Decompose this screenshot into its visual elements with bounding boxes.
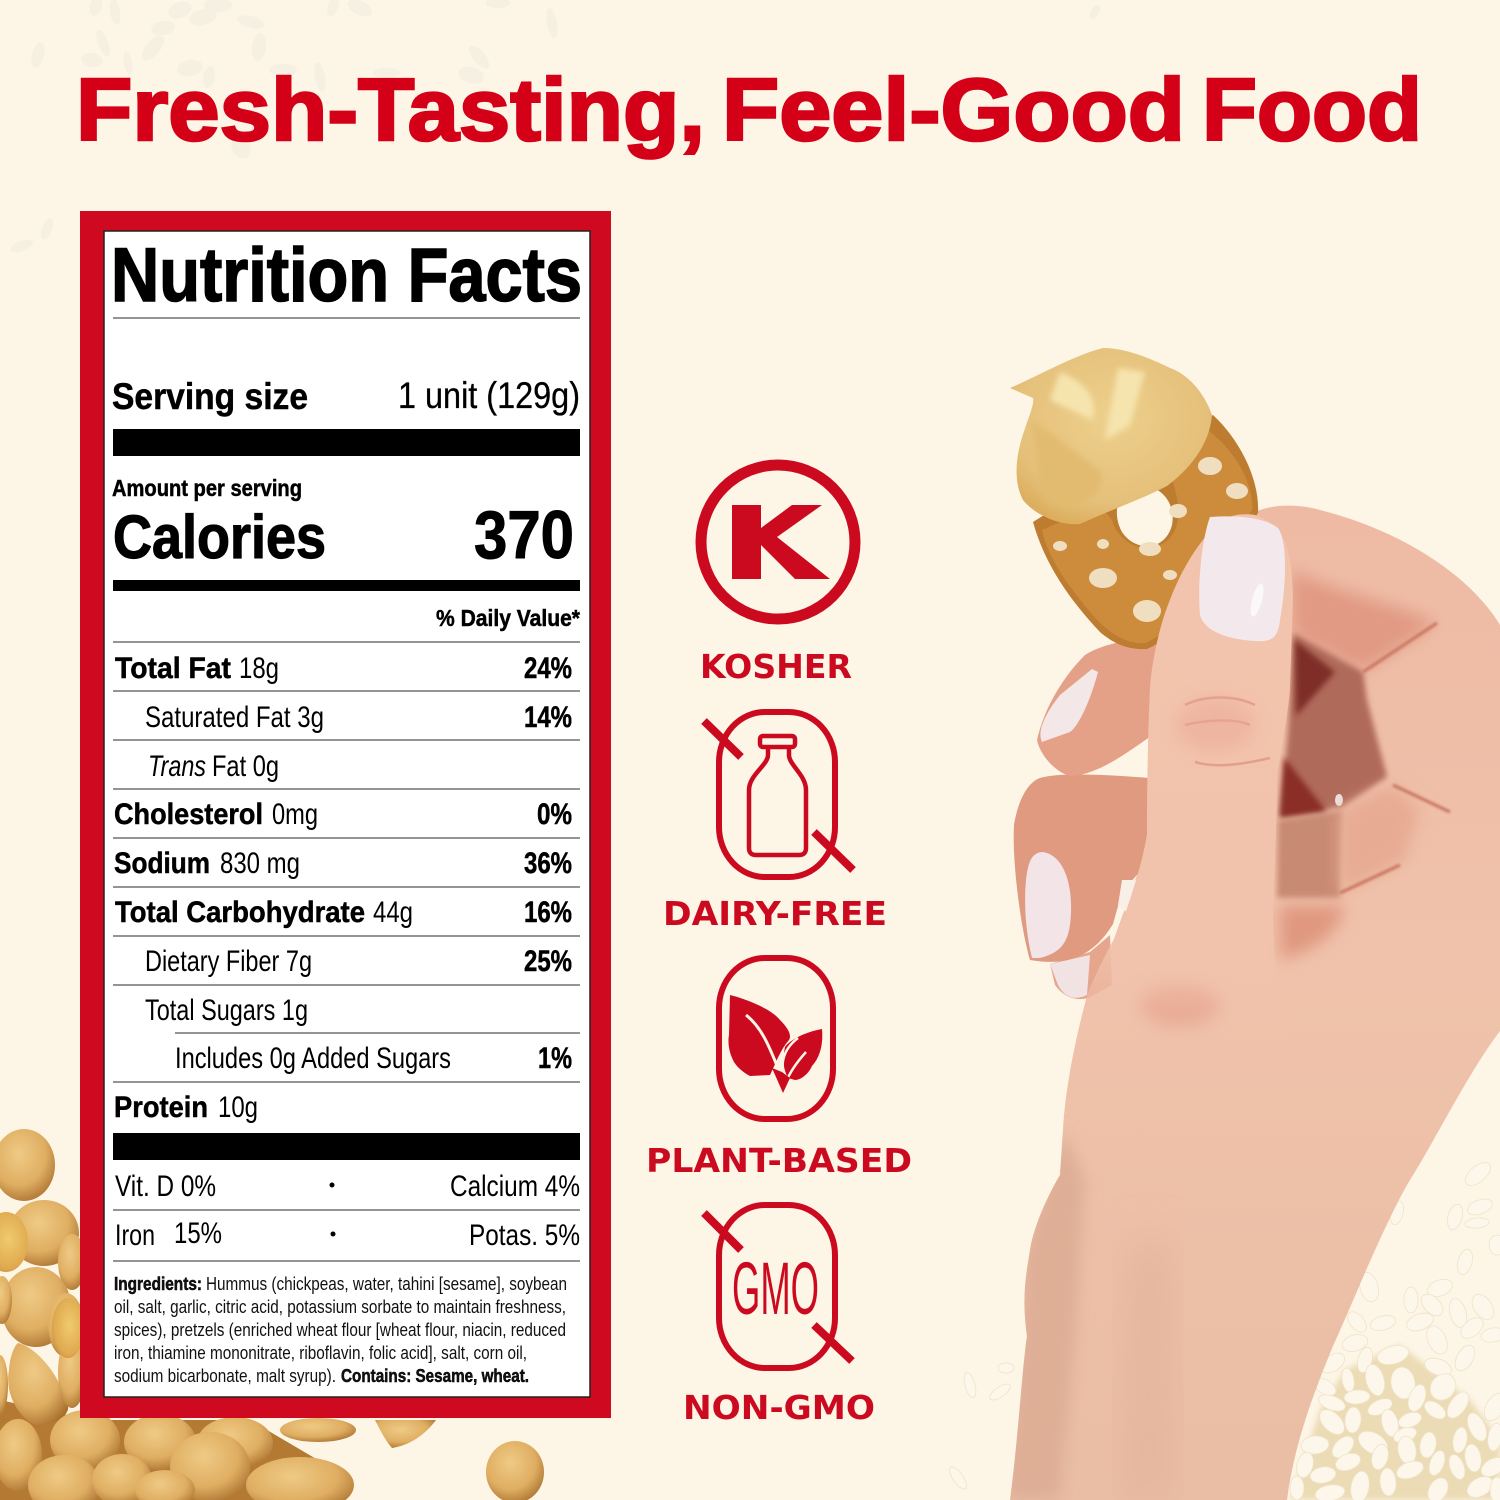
decoration: sesame seeds top left [9,0,1102,255]
calories row: 370 [474,497,574,573]
title: Food [1202,60,1422,159]
row: dietary fiber [145,945,572,978]
row: sodium: 830 mg [220,847,300,880]
serving size row: Serving size [112,376,308,417]
hand: pinky finger with nail [1050,935,1112,999]
ingredients text block: sodium bicarbonate, malt syrup). [114,1365,336,1386]
hand: curled finger lower [1277,810,1343,898]
row: total fat: 24% [524,652,572,685]
row: cholesterol: 0mg [272,798,318,831]
row: trans fat: Trans [148,750,206,783]
pretzel [1033,415,1258,649]
row: cholesterol [114,798,572,831]
row: total fat: 18g [239,652,279,685]
row: sodium: Sodium [114,847,210,880]
ingredients text block [114,1273,567,1386]
label: non-gmo: NON-GMO [683,1388,875,1427]
icon: plant-based [719,958,833,1119]
row: saturated fat [145,701,572,734]
row: vitamin d and calcium: Vit. D 0% [115,1170,216,1203]
photo: hand holding pretzel with hummus [1005,348,1500,1500]
ingredients text block: Ingredients: [114,1273,202,1294]
hand: middle finger nail [1040,669,1098,742]
hand: thumb nail [1199,516,1285,641]
row: protein: 10g [218,1091,258,1124]
hand: wrist blush [1140,983,1220,1027]
title: Fresh-Tasting, [76,60,705,159]
row: iron and potassium: 15% [174,1217,222,1250]
hand: ring highlight [1335,794,1343,806]
row: saturated fat: 14% [524,701,572,734]
ingredients text block: oil, salt, garlic, citric acid, potassium sorbate to maintain freshness, [114,1296,566,1317]
label: plant-based: PLANT-BASED [646,1141,912,1180]
label: dairy-free: DAIRY-FREE [663,894,887,933]
panel: nutrition facts label [80,211,611,1418]
icon: dairy-free [704,712,853,877]
ingredients text block: iron, thiamine mononitrate, riboflavin, folic acid], salt, corn oil, [114,1342,527,1363]
row: cholesterol: Cholesterol [114,798,263,831]
thick divider [113,429,580,456]
hand: ring finger nail [1025,852,1071,958]
ingredients text block: Contains: Sesame, wheat. [341,1365,529,1386]
row: total carbohydrate: 16% [524,896,572,929]
hand: palm creases [1340,623,1450,893]
row: total sugars: Total Sugars 1g [145,994,308,1027]
decoration: sesame seeds bottom right [946,1158,1500,1500]
row: trans fat [148,750,279,783]
title [76,60,1422,159]
hand: palm pad [1340,785,1420,893]
row: total carbohydrate: Total Carbohydrate [115,896,365,929]
row: dietary fiber: Dietary Fiber 7g [145,945,312,978]
hand: finger gap shadow lower [1280,757,1327,818]
row: total carbohydrate: 44g [373,896,413,929]
row: total fat [115,652,572,685]
serving size row: 1 unit (129g) [398,375,580,416]
row: vitamin d and calcium: Calcium 4% [450,1170,580,1203]
hand: thumb [1075,514,1293,1060]
hand: palm and wrist [1010,506,1500,1500]
hand: curled finger interior [1280,633,1387,817]
ingredients text block: Hummus (chickpeas, water, tahini [sesame], soybean [206,1273,567,1294]
icon: non-gmo [704,1205,852,1368]
hand: index finger shading [1290,570,1437,672]
hand: wrist side shading [1005,1130,1085,1500]
calories row [113,497,574,573]
daily value header: % Daily Value* [436,605,580,631]
row: sodium: 36% [524,847,572,880]
row: protein: Protein [114,1091,208,1124]
title: Feel-Good [722,60,1185,159]
hand: middle finger [1037,638,1160,776]
decoration: chickpeas bottom left [0,1129,544,1500]
ingredients text block: spices), pretzels (enriched wheat flour [wheat flour, niacin, reduced [114,1319,566,1340]
row: cholesterol: 0% [537,798,572,831]
label: kosher: KOSHER [700,647,852,686]
row: iron and potassium [115,1217,580,1252]
row: saturated fat: Saturated Fat 3g [145,701,324,734]
row: total carbohydrate [115,896,572,929]
row: added sugars: Includes 0g Added Sugars [175,1042,451,1075]
row: dietary fiber: 25% [524,945,572,978]
hand: thumb joint blush [1175,697,1255,753]
hand: finger gap shadow upper [1295,640,1335,716]
hand: thumb joint creases [1185,698,1270,765]
amount per serving: Amount per serving [112,475,302,501]
hand: thumb web shading [1280,905,1345,960]
thick divider [113,1133,580,1160]
icon: non-gmo: GMO [732,1247,819,1330]
hand: gap between finger and thumb [1118,880,1138,915]
calories row: Calories [113,503,326,571]
hand: thumb nail highlight [1248,582,1266,618]
row: iron and potassium: Iron [115,1219,155,1252]
row: trans fat: Fat 0g [212,750,279,783]
hand: wrist centre shadow [1125,1240,1170,1500]
row: iron and potassium: Potas. 5% [469,1219,580,1252]
hand: ring finger [1014,775,1150,962]
row: sodium [114,847,572,880]
row: vitamin d and calcium [115,1170,580,1203]
serving size row [112,375,580,417]
hummus [1010,348,1212,524]
heading: nutrition facts: Nutrition Facts [111,233,582,318]
row: total fat: Total Fat [115,652,231,685]
row: added sugars: 1% [538,1042,572,1075]
panel frame [80,211,611,1418]
icon: kosher [701,465,855,619]
panel inner sheet [104,231,590,1397]
medium divider [113,580,580,591]
